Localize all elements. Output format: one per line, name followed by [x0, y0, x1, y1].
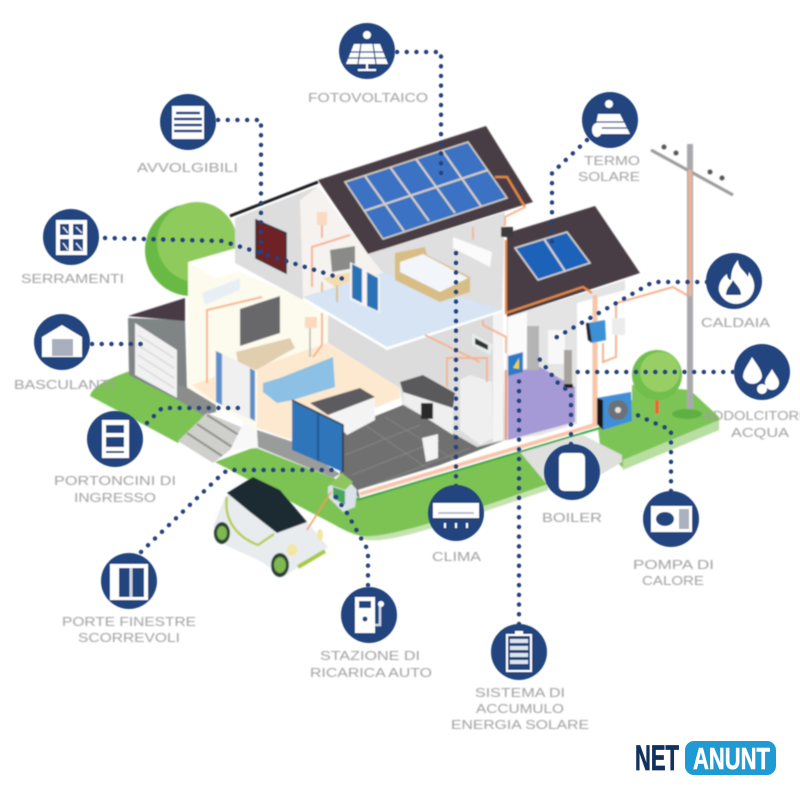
kitchen island — [310, 388, 375, 435]
left wall top slab — [188, 247, 240, 278]
main roof — [318, 126, 533, 254]
labels — [14, 90, 800, 732]
icon: basculanti — [34, 314, 90, 370]
line: serramenti — [105, 238, 350, 281]
lower TV — [240, 296, 280, 346]
label: clima: CLIMA — [432, 549, 481, 564]
upper left wall — [235, 186, 318, 300]
ground: right garden — [598, 385, 719, 470]
tree: right — [632, 350, 682, 414]
front strip — [357, 423, 600, 500]
line: basculanti — [92, 342, 150, 346]
line: termo — [552, 140, 587, 248]
icon: pompa — [643, 491, 699, 547]
label: porte finestre: SCORREVOLI — [78, 630, 180, 645]
logo word: ANUNT: ANUNT — [693, 741, 770, 776]
label: sistema: ENERGIA SOLARE — [451, 717, 589, 732]
icon: sistema — [491, 624, 547, 680]
blue inverter — [586, 320, 606, 343]
boiler tank — [527, 326, 539, 370]
ground: front lawn — [215, 445, 548, 540]
upper floor — [303, 273, 502, 347]
logo: NET ANUNT — [635, 739, 776, 778]
lower right wall — [328, 311, 505, 447]
upper white wall — [300, 186, 383, 299]
foundation grey — [257, 430, 340, 478]
junction box — [501, 227, 513, 237]
label: caldaia: CALDAIA — [701, 315, 770, 330]
kitchen counter — [400, 375, 455, 435]
line: fotovoltaico — [397, 52, 441, 175]
control panel — [472, 333, 493, 355]
foundation: front — [230, 414, 340, 478]
inverter white — [548, 330, 565, 364]
steps — [178, 413, 248, 463]
line: pompa — [633, 413, 671, 491]
storage inverter — [508, 352, 523, 376]
label: portoncini: PORTONCINI DI — [54, 473, 176, 488]
grey meter — [612, 318, 625, 335]
label: basculanti: BASCULANTI — [14, 377, 114, 392]
white wall below small roof — [508, 312, 527, 373]
lower AC — [202, 278, 240, 305]
line: clima — [454, 248, 458, 486]
icon: porte finestre — [101, 553, 157, 609]
logo word: NET: NET — [635, 739, 679, 778]
air conditioner upper — [453, 237, 492, 267]
tiled floor — [340, 405, 505, 497]
sofa — [263, 357, 335, 403]
line: avvolgibili — [218, 120, 261, 252]
path: walkway — [520, 435, 622, 490]
water appliance — [422, 434, 438, 462]
label: pompa: CALORE — [642, 573, 704, 588]
heat pump — [597, 392, 632, 430]
line: addolcitore — [572, 370, 733, 374]
line: stazione — [336, 497, 368, 588]
icon: fotovoltaico — [339, 23, 395, 79]
indoor door — [215, 350, 255, 422]
foundation: left — [178, 385, 216, 415]
ground floor left wall — [188, 262, 328, 430]
small house wall — [505, 280, 625, 440]
label: avvolgibili: AVVOLGIBILI — [137, 160, 238, 175]
floor edge — [303, 299, 502, 349]
line: porte finestre — [141, 470, 334, 552]
tile grid — [345, 417, 470, 490]
icon: clima — [428, 485, 484, 541]
label: boiler: BOILER — [542, 510, 602, 525]
icon: portoncini — [87, 411, 143, 467]
small roof — [507, 206, 640, 317]
sideboard — [236, 338, 295, 370]
label: termo: SOLARE — [578, 169, 640, 184]
label: stazione: RICARICA AUTO — [310, 665, 432, 680]
car — [213, 477, 331, 577]
wiring — [207, 225, 690, 387]
line: boiler — [537, 356, 571, 444]
cream floor: main — [257, 343, 400, 440]
cream floor: left — [192, 377, 215, 402]
charging station — [328, 473, 357, 512]
upper table — [322, 272, 350, 302]
lamp shades — [305, 212, 327, 328]
label: stazione: STAZIONE DI — [320, 648, 420, 663]
upper windows — [350, 262, 380, 313]
orange conduits — [495, 177, 592, 313]
label: sistema: SISTEMA DI — [475, 685, 565, 700]
salmon riser — [505, 370, 507, 440]
line: portoncini — [147, 408, 246, 423]
fridge — [460, 375, 493, 445]
icon: avvolgibili — [160, 94, 216, 150]
white strip under island — [345, 398, 400, 428]
logo badge — [685, 741, 776, 775]
ground: left lawn — [90, 371, 205, 443]
bed — [395, 247, 470, 302]
eave — [230, 182, 318, 216]
line: caldaia — [550, 282, 707, 341]
peach conduit — [592, 295, 598, 425]
pipe — [564, 350, 573, 388]
icon: stazione — [341, 587, 397, 643]
label: fotovoltaico: FOTOVOLTAICO — [308, 90, 428, 105]
tree: left — [145, 202, 237, 296]
line: sistema — [517, 376, 521, 624]
solar thermal panels — [515, 232, 590, 280]
label: sistema: ACCUMULO — [476, 701, 564, 716]
label: serramenti: SERRAMENTI — [21, 271, 124, 286]
solar array — [345, 142, 507, 239]
label: addolcitore: ADDOLCITORE — [703, 408, 800, 423]
icon: boiler — [544, 444, 600, 500]
garage — [128, 298, 187, 400]
label: porte finestre: PORTE FINESTRE — [62, 614, 196, 629]
lamp stand — [309, 328, 311, 357]
connectors — [92, 52, 733, 624]
icon: termo — [582, 92, 638, 148]
icon: caldaia — [706, 253, 762, 309]
icons — [34, 23, 790, 680]
lower pillar — [493, 310, 503, 442]
sliding doors — [292, 400, 343, 472]
label: termo: TERMO — [584, 153, 640, 168]
roof drop conduit — [505, 207, 525, 226]
icon: addolcitore — [734, 344, 790, 400]
label: addolcitore: ACQUA — [731, 425, 789, 440]
icon: serramenti — [43, 209, 99, 265]
upper TV — [330, 246, 355, 272]
label: pompa: POMPA DI — [633, 557, 714, 572]
battery room — [508, 367, 575, 440]
power pole — [651, 144, 733, 419]
house illustration — [90, 126, 733, 577]
upper back wall — [368, 212, 505, 312]
label: portoncini: INGRESSO — [74, 490, 156, 505]
roller shutter — [256, 220, 286, 273]
